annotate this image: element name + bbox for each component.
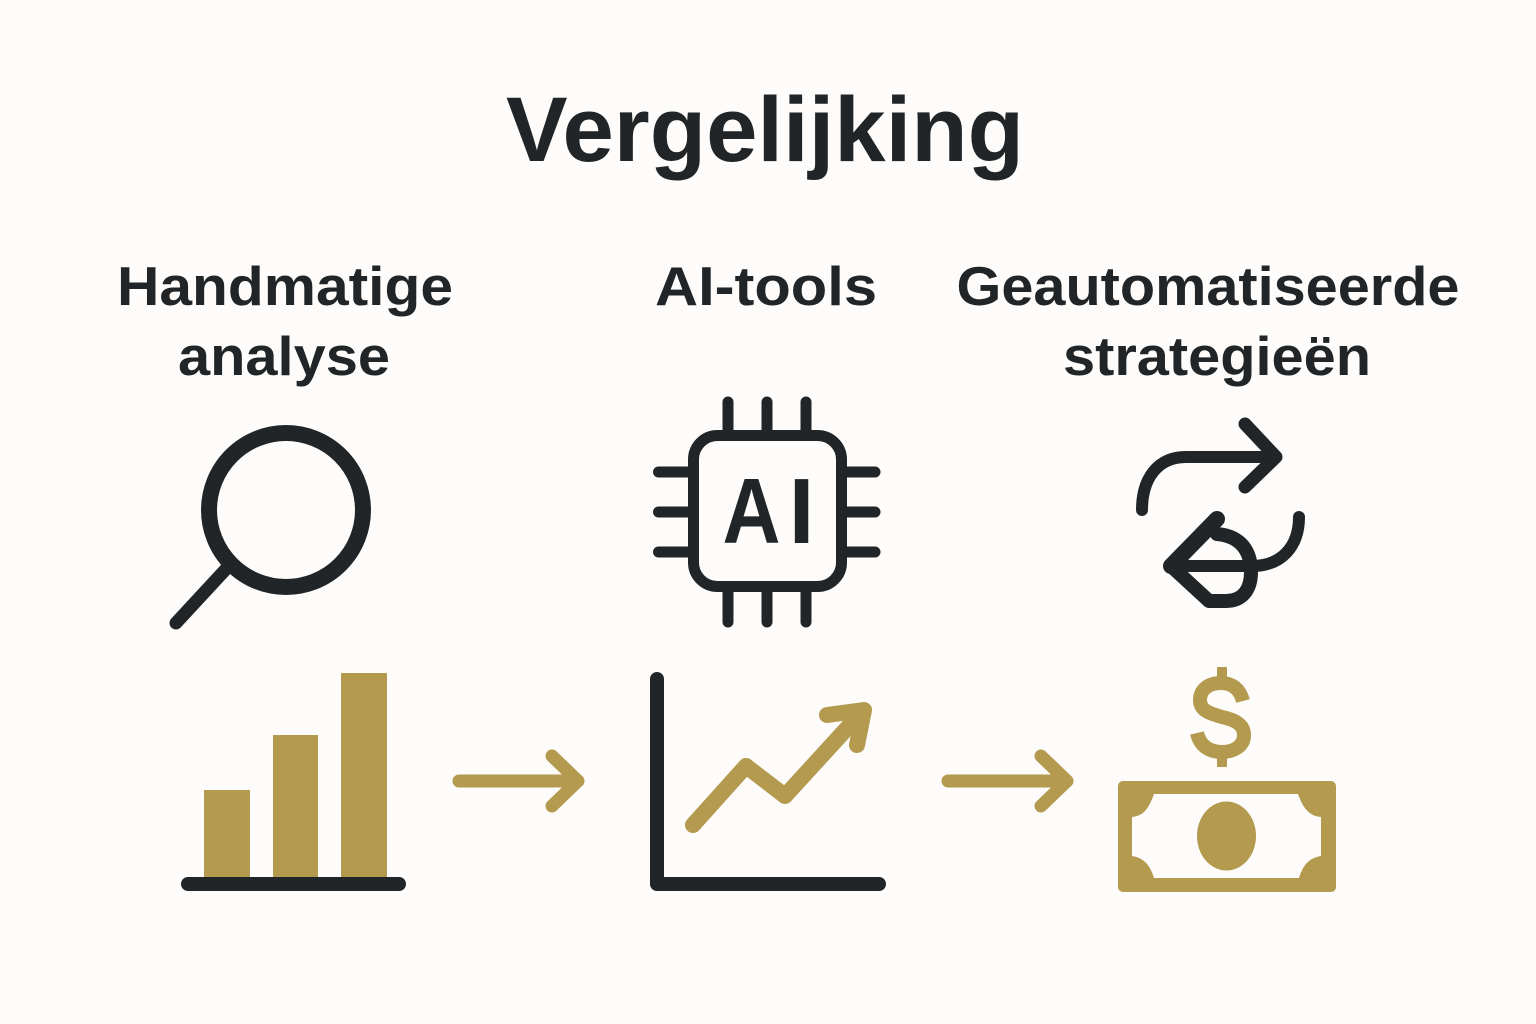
- heading: automated strategies: [956, 255, 1460, 387]
- icon: growth chart: [657, 679, 879, 884]
- icon: magnifying glass: [176, 433, 363, 623]
- icon: AI chip: I: [789, 459, 814, 563]
- heading: manual analysis: analyse: [178, 325, 390, 387]
- heading: automated strategies: strategieën: [1063, 325, 1371, 387]
- heading: automated strategies: Geautomatiseerde: [956, 255, 1460, 317]
- heading: AI tools: AI-tools: [655, 255, 877, 317]
- arrow: growth chart to money: [948, 756, 1067, 806]
- icon: dollar sign: [1197, 667, 1244, 767]
- icon: banknote: [1118, 781, 1336, 892]
- icon: AI chip: A: [722, 459, 780, 563]
- icon: AI chip: [658, 402, 875, 622]
- heading: manual analysis: Handmatige: [117, 255, 453, 317]
- heading: manual analysis: [117, 255, 453, 387]
- arrow: bars to growth chart: [459, 756, 578, 806]
- icon: automation arrows: [1142, 424, 1299, 601]
- title: Vergelijking: [506, 79, 1024, 181]
- icon: bar chart: [188, 673, 399, 884]
